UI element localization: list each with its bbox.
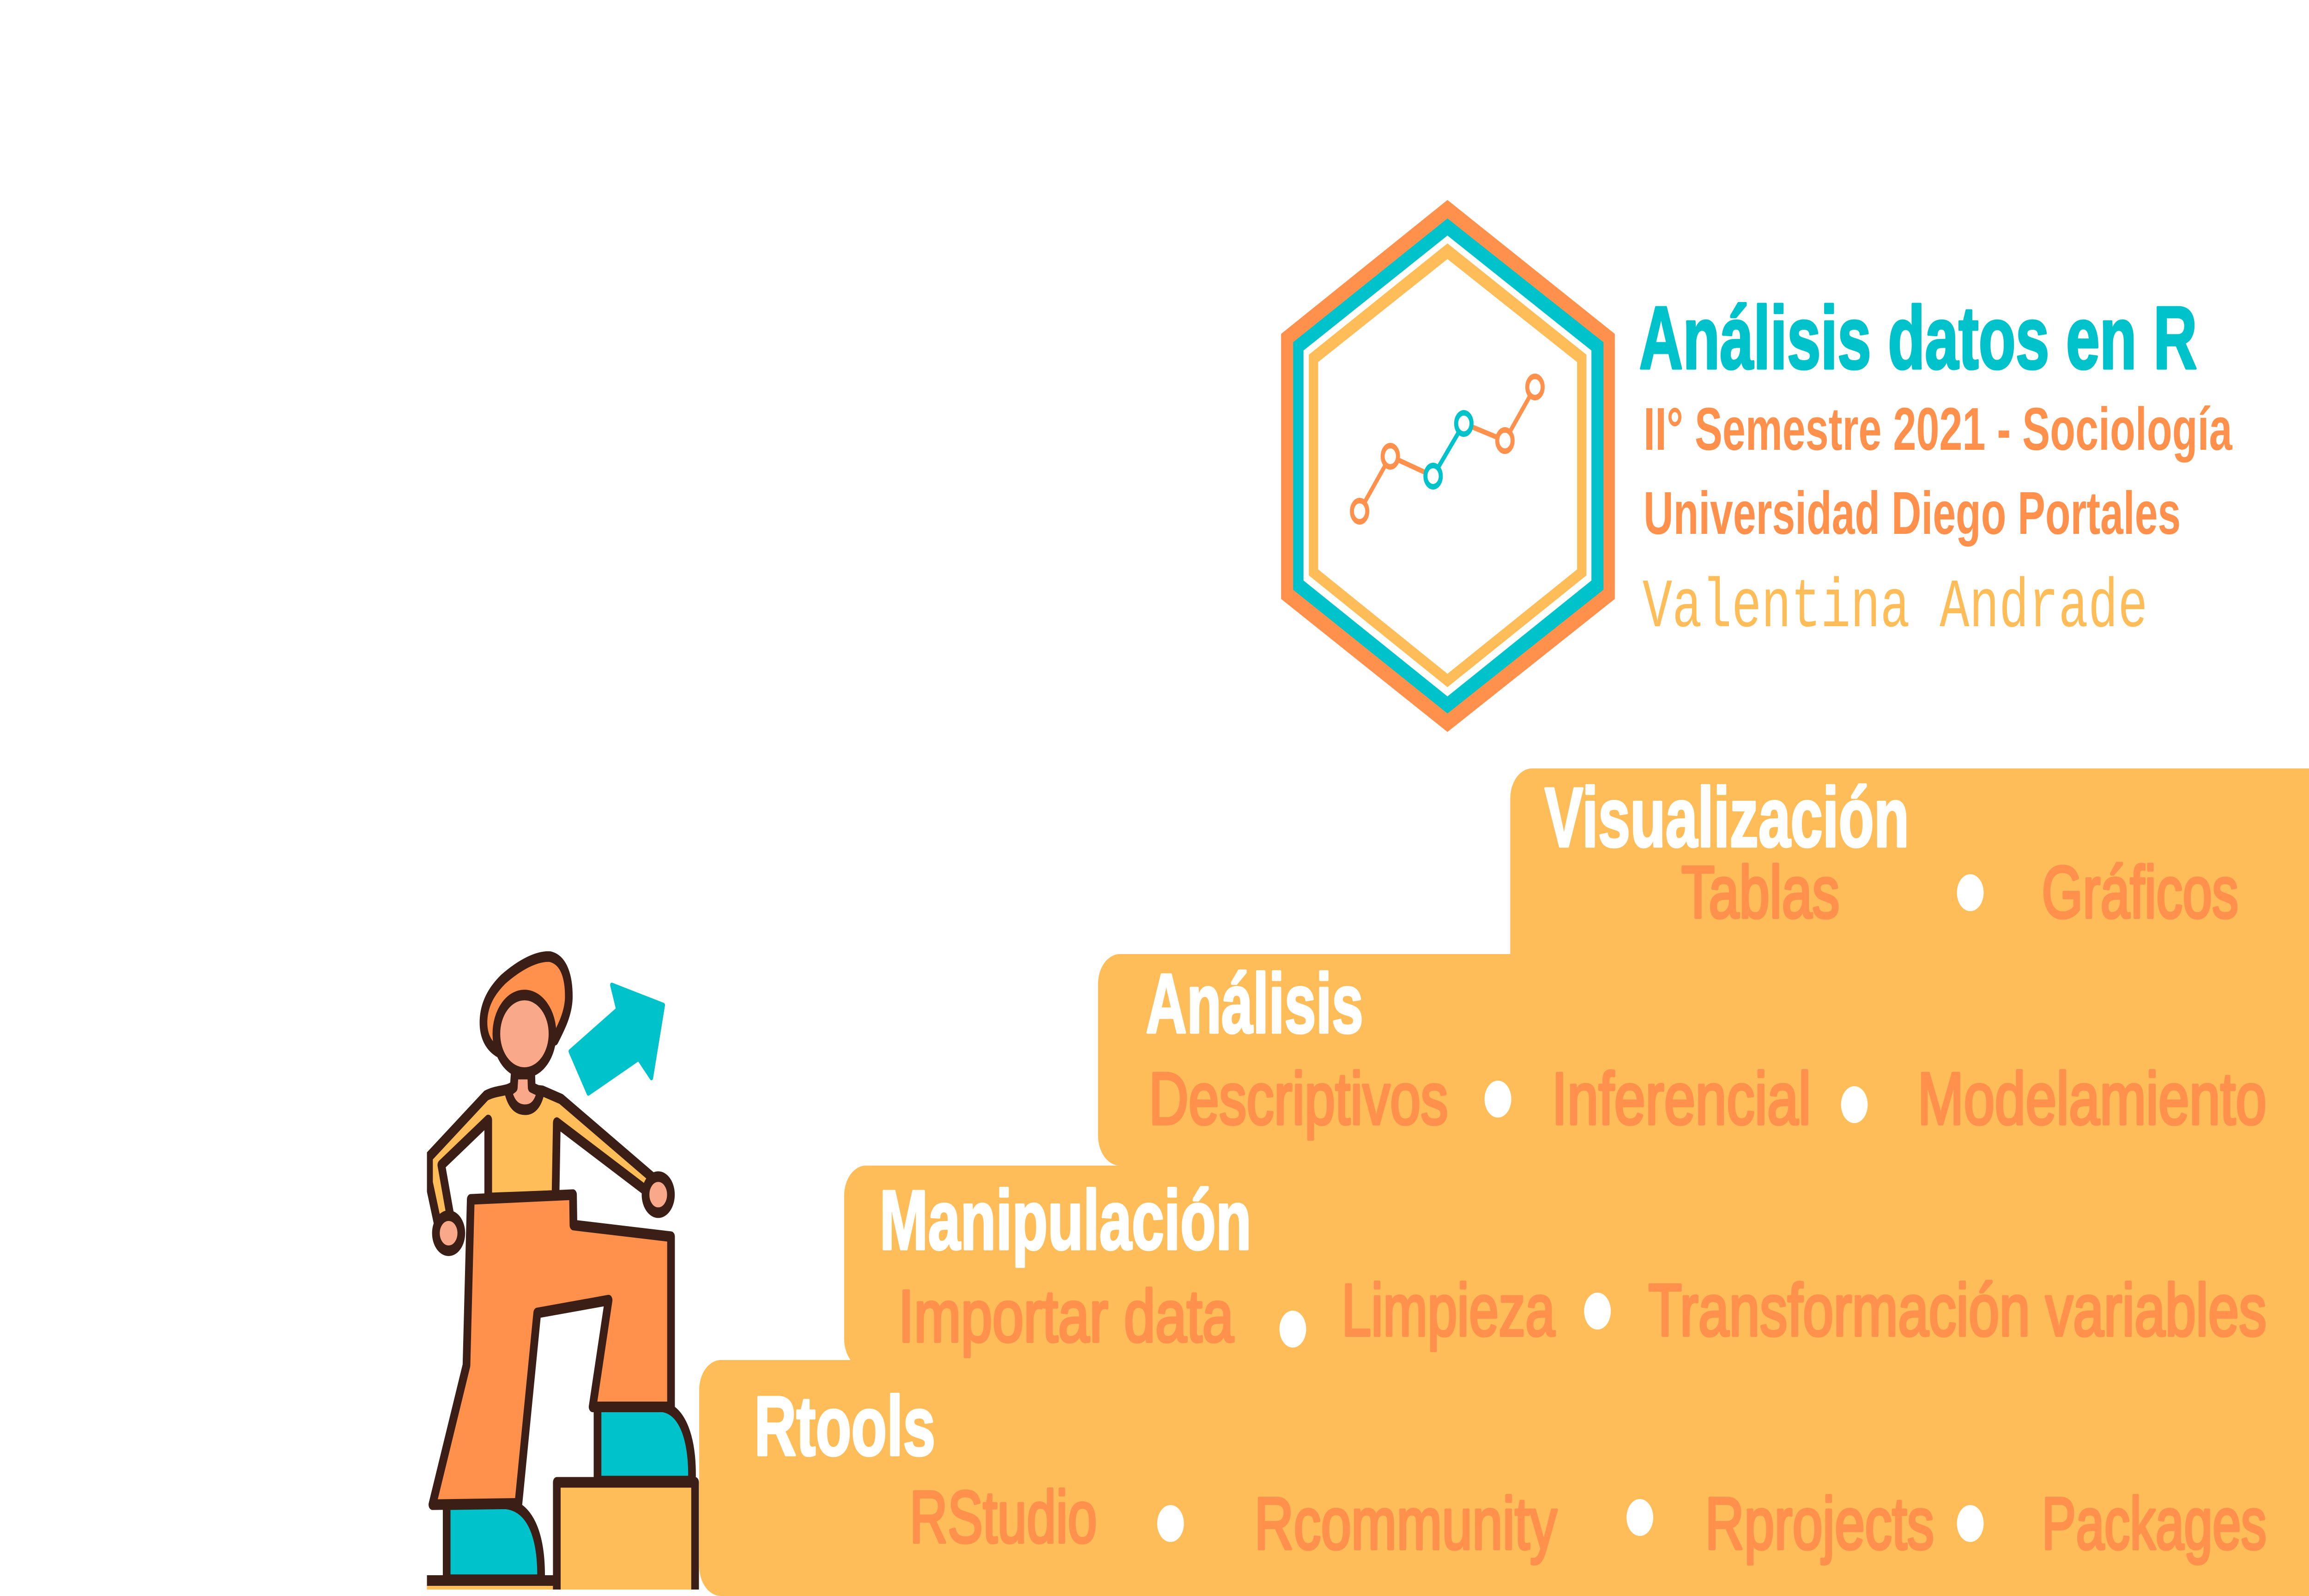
step: Rtools: [699, 1360, 2309, 1596]
illustration: person climbing stairs: [427, 956, 699, 1590]
step: Visualización: Tablas: [1681, 851, 1840, 933]
hair: [484, 956, 569, 1052]
step: Visualización: Gráficos: [2042, 851, 2238, 933]
step: Análisis: Modelamiento: [1917, 1058, 2267, 1140]
step: Manipulación: Transformación variables: [1648, 1269, 2267, 1351]
staircase: [699, 768, 2309, 1596]
lower shoe: [447, 1504, 541, 1580]
icon: growth arrow: [570, 985, 663, 1094]
step: Análisis: Inferencial: [1552, 1058, 1811, 1140]
step box: [427, 1482, 699, 1590]
step: Rtools: Packages: [2042, 1482, 2267, 1565]
step: Análisis: Descriptivos: [1149, 1058, 1448, 1140]
step: Análisis: Análisis: [1146, 956, 1363, 1051]
step: Manipulación: Importar data: [898, 1275, 1234, 1357]
logo: hexagon with line chart: [1281, 200, 1615, 732]
line chart icon: [1352, 376, 1543, 522]
neck and collar: [508, 1074, 541, 1110]
step: Visualización: Visualización: [1545, 770, 1909, 864]
subtitle: semester: II° Semestre 2021 - Sociología: [1644, 396, 2233, 463]
step: Manipulación: Manipulación: [880, 1173, 1251, 1267]
step: Visualización: [1510, 768, 2309, 1046]
step: Rtools: Rprojects: [1705, 1482, 1934, 1565]
right hand: [646, 1177, 671, 1213]
step: Rtools: Rcommunity: [1254, 1482, 1557, 1565]
step: Rtools: RStudio: [910, 1476, 1097, 1558]
title: Análisis datos en R: [1639, 288, 2197, 387]
step: Análisis: [1098, 954, 2309, 1166]
left hand: [436, 1215, 461, 1251]
head: [496, 995, 552, 1073]
step: Manipulación: Limpieza: [1342, 1269, 1555, 1351]
title block: [1639, 288, 2233, 647]
trousers: [432, 1195, 671, 1505]
author: Valentina Andrade: [1643, 569, 2148, 647]
step: Rtools: Rtools: [754, 1378, 935, 1473]
hexagon frame: [1281, 200, 1615, 732]
shirt and arms: [429, 1088, 652, 1222]
step: Manipulación: [844, 1166, 2309, 1369]
upper shoe: [598, 1407, 692, 1481]
subtitle: university: Universidad Diego Portales: [1644, 480, 2181, 547]
